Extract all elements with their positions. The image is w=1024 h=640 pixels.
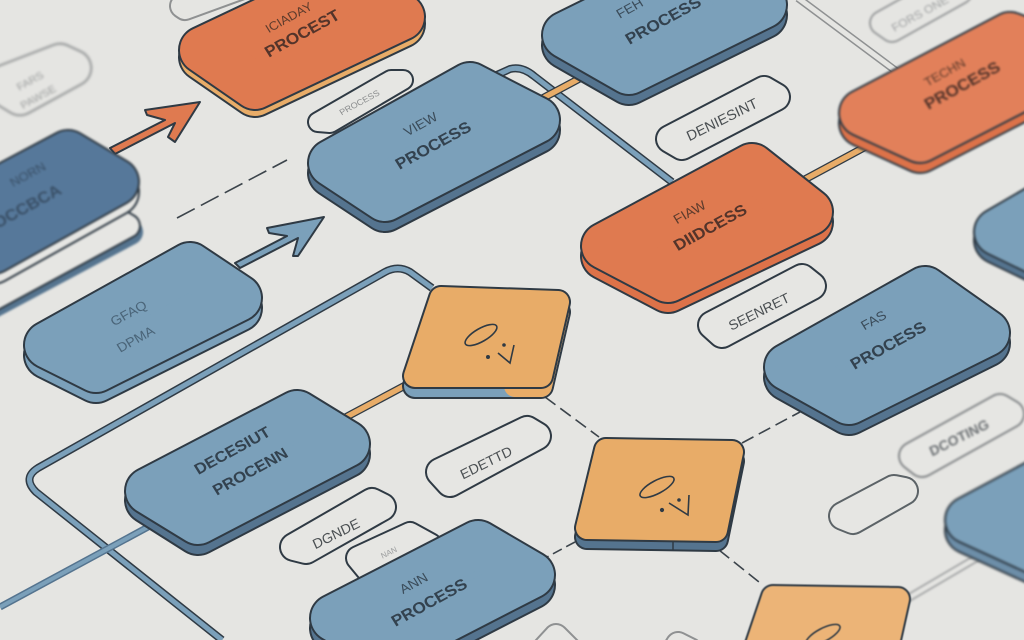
arrow: blue — [235, 217, 324, 268]
process: orange FIAW DIIDCESS: DIIDCESS — [670, 200, 750, 255]
process: orange PROCEST: PROCEST — [261, 6, 343, 61]
process: blue VIEW PROCESS — [332, 86, 536, 208]
pill: small label behind ANN process — [358, 534, 430, 575]
process: orange TECHN PROCESS — [863, 36, 1024, 149]
process: orange TECHN PROCESS: TECHN — [922, 56, 968, 89]
process: dark card stack at left — [0, 154, 130, 312]
process: blue ANN PROCESS: ANN — [397, 570, 431, 597]
pill: empty label — [843, 489, 904, 520]
process: blue ANN PROCESS: PROCESS — [388, 575, 471, 630]
process: blue DECESIUT PROCENN — [149, 414, 346, 531]
dark top card — [0, 154, 115, 250]
process: orange PROCEST: ICIADAY — [263, 0, 315, 36]
process: blue VIEW PROCESS: PROCESS — [392, 118, 475, 173]
pill: top-left faded: PAWSE — [18, 83, 58, 112]
connector: blue line to orange process — [490, 68, 672, 182]
process: blue GFAQ DPMA: DPMA — [114, 323, 158, 355]
process: blue VIEW PROCESS: VIEW — [401, 109, 440, 139]
icon: decision glyph — [803, 620, 843, 640]
process: orange TECHN PROCESS: PROCESS — [921, 58, 1004, 113]
pill: DGNDE — [294, 502, 382, 552]
dashed connectors — [177, 160, 800, 582]
pill: top faded — [182, 0, 240, 8]
pill: DENIESINT — [670, 90, 776, 146]
icon: decision glyph — [637, 472, 689, 515]
pill: DCOTING — [913, 408, 1010, 463]
process: blue DECESIUT PROCENN: DECESIUT — [191, 423, 274, 478]
white middle card — [0, 164, 115, 260]
arrow: orange — [110, 102, 200, 154]
pill: SEENRET: SEENRET — [726, 289, 792, 334]
process: blue GFAQ DPMA — [48, 266, 238, 379]
process: orange FIAW DIIDCESS — [605, 167, 809, 289]
process: blue FEH PROCESS — [566, 0, 763, 81]
connector: blue line from left edge — [0, 527, 148, 607]
dark top card: NORN — [8, 160, 48, 190]
pill: top-left faded — [0, 62, 73, 112]
icon: decision glyph — [462, 320, 514, 363]
process: orange FIAW DIIDCESS: FIAW — [671, 198, 709, 227]
process: blue FAS PROCESS: PROCESS — [847, 318, 930, 373]
process: blue GFAQ DPMA: GFAQ — [108, 298, 150, 329]
connector: orange link top — [530, 73, 590, 105]
decision: orange diamond centre — [587, 450, 732, 551]
pill: bottom edge left — [534, 636, 570, 640]
pill: DCOTING: DCOTING — [927, 416, 991, 459]
decision: orange diamond upper — [415, 298, 558, 386]
connector: grey double line top right — [798, 0, 900, 74]
connector: orange link to decision — [335, 384, 408, 423]
pill: small label behind ANN process: NAN — [380, 545, 399, 561]
pill: EDETTD: EDETTD — [458, 443, 514, 482]
decision: orange diamond bottom — [745, 597, 898, 640]
process: blue DECESIUT PROCENN: PROCENN — [210, 445, 291, 499]
process: blue FAS PROCESS — [788, 290, 986, 411]
connector: grey double line lower right — [905, 553, 985, 600]
connector: long blue route — [29, 268, 432, 640]
under card with blue edge — [0, 180, 130, 312]
process: blue far right — [998, 196, 1024, 270]
pill: SEENRET — [712, 278, 812, 334]
process: blue ANN PROCESS — [334, 544, 531, 640]
pill: small label above view process: PROCESS — [338, 88, 382, 117]
pill: DGNDE: DGNDE — [310, 515, 362, 552]
pill: top-left faded: FARS — [15, 70, 46, 93]
pill: EDETTD — [440, 430, 537, 483]
pill: small label above view process — [318, 80, 403, 123]
pill: DENIESINT: DENIESINT — [684, 96, 761, 145]
process: orange PROCEST — [203, 0, 401, 93]
process: blue far right lower — [969, 466, 1024, 567]
process: blue FAS PROCESS: FAS — [858, 308, 889, 333]
connector: orange link right — [800, 140, 878, 182]
